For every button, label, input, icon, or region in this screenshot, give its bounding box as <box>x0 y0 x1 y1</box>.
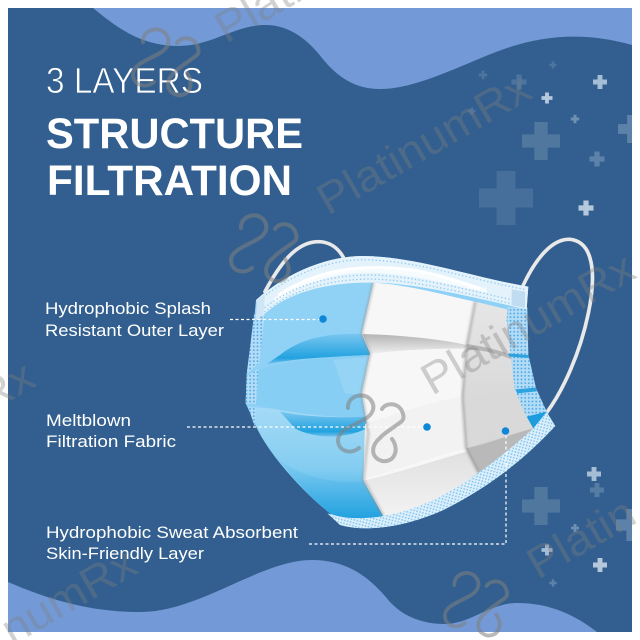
title <box>46 60 303 205</box>
dotted left edge <box>247 307 266 374</box>
ear loops <box>265 239 592 413</box>
label: outer layer: Resistant Outer Layer <box>45 321 224 340</box>
watermark: PlatinumRx text: PlatinumRx <box>412 242 640 404</box>
grey inner layer <box>462 302 533 473</box>
label: outer layer: Hydrophobic Splash <box>45 299 211 318</box>
right blue edge <box>507 307 547 428</box>
top wave <box>93 8 632 89</box>
label: outer layer <box>45 299 224 340</box>
white meltblown layer <box>362 283 478 516</box>
leader line: meltblown layer <box>187 423 431 431</box>
decorative plus icons, upper right <box>468 61 640 225</box>
mask base silhouette <box>246 256 555 528</box>
label: meltblown layer: Meltblown <box>46 411 131 430</box>
title line: structure: STRUCTURE <box>46 110 303 158</box>
label: inner layer: Hydrophobic Sweat Absorbent <box>46 523 298 542</box>
title line: 3 layers: 3 LAYERS <box>46 60 203 101</box>
blue outer layer <box>246 283 384 518</box>
label: meltblown layer: Filtration Fabric <box>46 432 177 451</box>
label: meltblown layer <box>46 411 177 451</box>
title line: filtration: FILTRATION <box>47 157 292 205</box>
label: inner layer: Skin-Friendly Layer <box>46 544 204 563</box>
decorative plus icons, lower right <box>522 467 640 587</box>
bottom wave <box>8 560 597 632</box>
illustration: surgical mask <box>246 239 592 528</box>
label: inner layer <box>46 523 298 563</box>
watermark: logo marks <box>133 29 507 636</box>
bottom band <box>327 413 555 528</box>
watermark: PlatinumRx text: PlatinumRx <box>308 62 540 224</box>
leader line: inner layer <box>309 427 509 544</box>
leader line: outer layer <box>230 315 327 323</box>
top band with nose wire <box>256 256 528 320</box>
